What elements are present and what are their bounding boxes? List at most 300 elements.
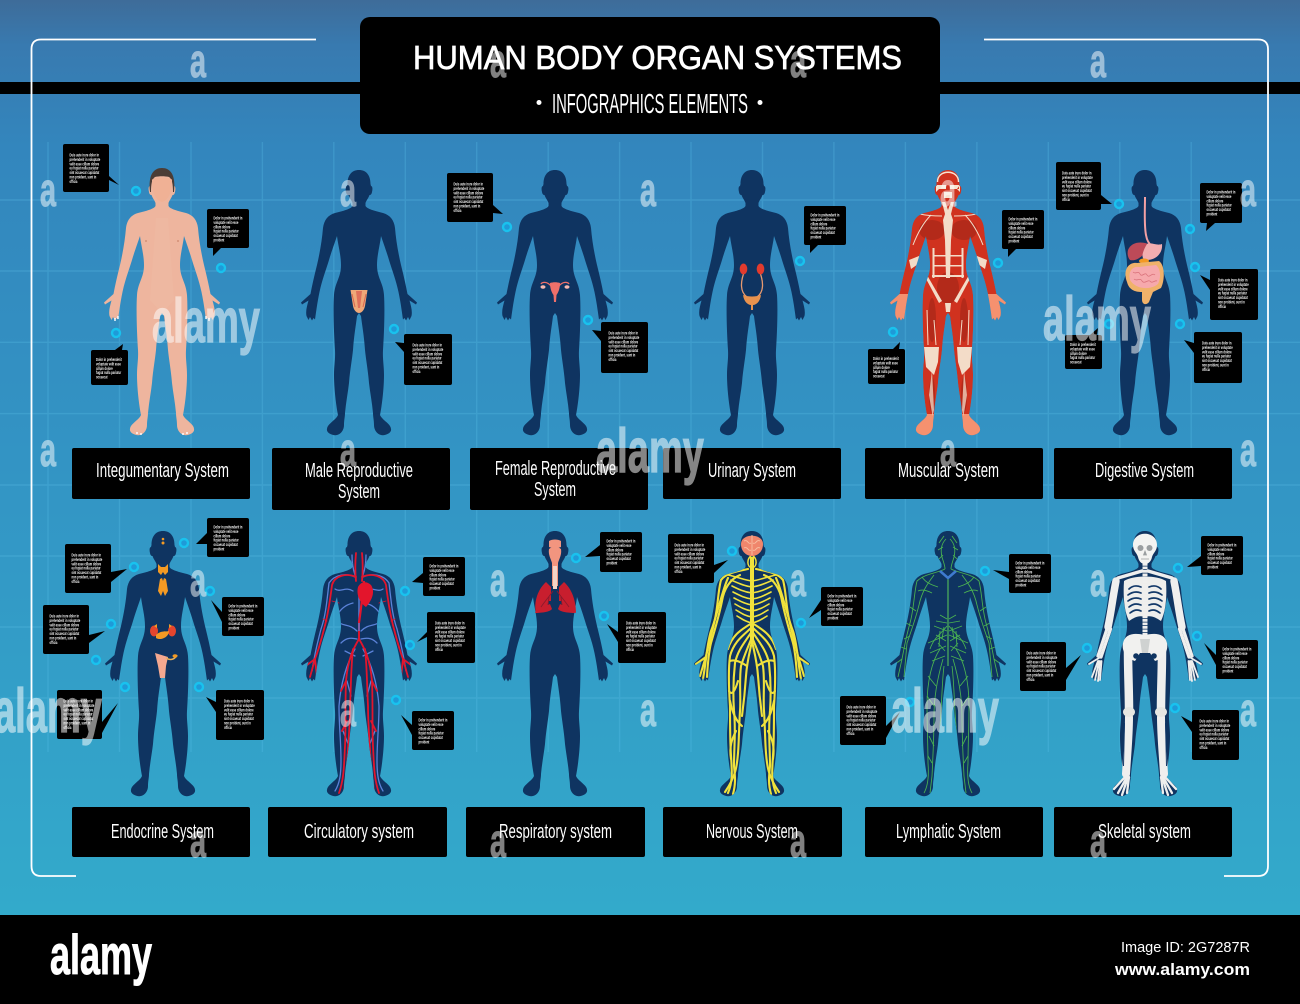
callouts: skeletal: cillum dolore	[1222, 656, 1239, 661]
subtitle	[536, 88, 762, 119]
callouts: endocrine: officia	[50, 640, 58, 645]
label: Urinary System	[663, 448, 841, 499]
callouts: skeletal: proident	[1222, 669, 1234, 674]
watermarks: a	[190, 34, 207, 87]
watermarks: alamy	[152, 287, 260, 356]
vessels	[307, 553, 411, 793]
callout: male reproductive: eu fugiat nulla pariatur	[412, 356, 442, 361]
callouts: circulatory: cillum dolore	[418, 727, 435, 732]
callouts: endocrine: prehenderit in voluptate	[64, 703, 94, 708]
callouts: endocrine: Dolor in prehenderit in	[228, 604, 258, 609]
callouts: lymphatic: velit esse cillum dolore	[846, 714, 876, 719]
callouts: endocrine: officia	[64, 725, 72, 730]
callouts: lymphatic: officia	[846, 731, 855, 736]
callouts: circulatory: Duis aute irure dolor in	[435, 621, 465, 626]
callouts: female reproductive: sint occaecat cupidatat	[608, 348, 639, 353]
callouts: endocrine: proident	[228, 626, 240, 631]
callouts: respiratory: velit esse cillum dolore	[626, 630, 656, 635]
callouts: circulatory: fugiat nulla pariatur	[418, 731, 444, 736]
watermarks: a	[640, 163, 657, 216]
callouts: skeletal: velit esse cillum dolore	[1200, 728, 1229, 733]
callouts: female reproductive: officia	[608, 357, 617, 362]
watermarks: a	[1240, 683, 1257, 736]
callouts: respiratory: non proident, sunt in	[626, 643, 653, 648]
callouts: endocrine: eu fugiat nulla pariatur	[224, 712, 253, 717]
callouts: muscular: fugiat nulla pariatur	[873, 370, 899, 374]
organ: intestines	[1125, 261, 1164, 304]
callouts: lymphatic: non proident, sunt in	[1026, 673, 1054, 678]
callouts: respiratory	[572, 532, 666, 663]
callouts: circulatory: eu fugiat nulla pariatur	[435, 634, 464, 639]
figure: digestive system	[1087, 170, 1203, 435]
callouts: circulatory: Dolor in prehenderit in	[430, 564, 459, 569]
label: Skeletal system	[1054, 807, 1232, 857]
callouts: female reproductive: velit esse cillum dolore	[454, 191, 483, 196]
callout: urinary: voluptate velit esse	[810, 217, 835, 222]
watermarks: a	[790, 814, 807, 867]
figure: skeletal system	[1087, 531, 1203, 796]
label: Circulatory system	[268, 807, 447, 857]
callouts: muscular: occaecat	[873, 374, 885, 379]
callouts: digestive: Duis aute irure dolor in	[1062, 171, 1092, 176]
callouts: integumentary: Dolor in prehenderit in	[214, 216, 243, 221]
callouts: endocrine: proident	[214, 547, 225, 552]
callouts: circulatory: Dolor in prehenderit in	[418, 718, 448, 723]
callouts: muscular: Dolor in prehenderit	[873, 356, 899, 361]
callouts: integumentary: officia	[70, 179, 78, 184]
callouts: integumentary: cillum dolore	[96, 366, 113, 371]
label: Male Reproductive System	[272, 448, 450, 510]
label: Lymphatic System: Lymphatic System	[896, 820, 1001, 843]
callouts: muscular: Dolor in prehenderit in	[1008, 217, 1038, 222]
callouts: digestive: prehenderit in voluptate	[1202, 345, 1233, 350]
callouts: female reproductive: prehenderit in voluptate	[608, 335, 639, 340]
callouts: muscular	[868, 210, 1044, 384]
organ: urinary	[740, 264, 764, 310]
watermarks: a	[340, 683, 357, 736]
skeleton	[1089, 534, 1201, 795]
callouts: lymphatic: velit esse cillum dolore	[1026, 660, 1056, 665]
label: Nervous System: Nervous System	[706, 820, 798, 843]
callouts: endocrine	[43, 518, 264, 740]
callouts: integumentary: prehenderit in voluptate	[70, 157, 100, 162]
callouts: circulatory: fugiat nulla pariatur	[430, 577, 455, 582]
callouts: endocrine: eu fugiat nulla pariatur	[50, 627, 79, 632]
callout: male reproductive: non proident, sunt in	[412, 365, 440, 370]
callouts: endocrine: eu fugiat nulla pariatur	[72, 566, 101, 571]
callouts: digestive: velit esse cillum dolore	[1218, 287, 1248, 292]
callout: urinary: proident	[810, 235, 822, 240]
organ: esophagus	[1145, 197, 1152, 246]
callouts: female reproductive: prehenderit in voluptate	[454, 186, 484, 191]
label: Circulatory system: Circulatory system	[304, 820, 414, 843]
figure: circulatory system	[301, 531, 417, 796]
callouts: muscular: voluptate velit esse	[1008, 221, 1033, 226]
callouts: endocrine: Duis aute irure dolor in	[224, 699, 254, 704]
callouts: respiratory: cillum dolore	[606, 548, 623, 553]
callouts: respiratory: eu fugiat nulla pariatur	[626, 634, 655, 639]
callouts: skeletal	[1171, 536, 1258, 760]
callouts: skeletal: occaecat cupidatat	[1222, 664, 1247, 669]
callouts: lymphatic: officia	[1026, 677, 1035, 682]
watermarks: a	[940, 163, 957, 216]
callouts: circulatory: voluptate velit esse	[430, 568, 454, 573]
callouts: digestive: cillum dolore	[1070, 351, 1087, 356]
callouts: nervous: Duis aute irure dolor in	[674, 543, 705, 548]
label: Male Reproductive System: System	[338, 480, 380, 503]
callouts: skeletal: voluptate velit esse	[1208, 547, 1232, 552]
callouts: nervous: cillum dolore	[828, 603, 844, 608]
callouts: endocrine: velit esse cillum dolore	[72, 562, 101, 567]
callouts: circulatory	[392, 557, 475, 750]
watermarks: a	[940, 423, 957, 476]
figure: respiratory system	[497, 531, 613, 796]
callouts: respiratory: Dolor in prehenderit in	[606, 539, 636, 544]
callouts: lymphatic: Duis aute irure dolor in	[846, 705, 877, 710]
callouts: circulatory: officia	[435, 647, 444, 652]
callouts: endocrine: non proident, sunt in	[64, 721, 91, 726]
callout: urinary	[796, 206, 846, 265]
callouts: lymphatic: prehenderit in voluptate	[1026, 655, 1057, 660]
figure: integumentary system	[104, 168, 220, 435]
callouts: circulatory: prehenderit in voluptate	[435, 625, 466, 630]
callouts: digestive: officia	[1218, 304, 1227, 309]
callouts: endocrine: sint occaecat cupidatat	[72, 570, 102, 575]
callouts: integumentary: voluptate velit esse	[214, 220, 238, 225]
callouts: digestive: occaecat	[1070, 360, 1082, 365]
callouts: digestive: voluptate velit esse	[1070, 347, 1095, 352]
callouts: muscular: cillum dolore	[873, 365, 890, 370]
organ: lungs	[535, 582, 576, 613]
footer logo: alamy	[50, 923, 152, 986]
callouts: circulatory: cillum dolore	[430, 573, 446, 578]
callouts: lymphatic: occaecat cupidatat	[1016, 578, 1040, 583]
callouts: endocrine: velit esse cillum dolore	[50, 623, 79, 628]
callouts: digestive: voluptate velit esse	[1206, 194, 1231, 199]
callouts: endocrine: voluptate velit esse	[228, 608, 253, 613]
callouts: lymphatic	[840, 554, 1091, 745]
callouts: nervous: sint occaecat cupidatat	[674, 560, 705, 565]
callouts: circulatory: velit esse cillum dolore	[435, 630, 465, 635]
callouts: integumentary: voluptate velit esse	[96, 362, 121, 367]
callouts: digestive: velit esse cillum dolore	[1202, 350, 1232, 355]
label: Muscular System	[865, 448, 1043, 499]
heart	[357, 582, 373, 607]
label: Integumentary System	[72, 448, 250, 499]
footer bar	[0, 915, 1300, 1004]
callouts: respiratory: prehenderit in voluptate	[626, 625, 657, 630]
watermarks: a	[1090, 34, 1107, 87]
callouts: lymphatic: proident	[1016, 583, 1027, 588]
callout: male reproductive: Duis aute irure dolor in	[412, 343, 443, 348]
callouts: endocrine: Duis aute irure dolor in	[72, 553, 102, 558]
callouts: respiratory: voluptate velit esse	[606, 543, 631, 548]
callouts: skeletal: occaecat cupidatat	[1208, 560, 1232, 565]
subtitle: INFOGRAPHICS ELEMENTS	[552, 88, 748, 119]
callouts: skeletal: fugiat nulla pariatur	[1208, 556, 1233, 561]
callouts: muscular: fugiat nulla pariatur	[1008, 230, 1034, 235]
callouts: digestive: proident	[1206, 212, 1218, 217]
callouts: digestive: eu fugiat nulla pariatur	[1218, 291, 1247, 296]
label: Lymphatic System	[865, 807, 1043, 857]
callouts: nervous: fugiat nulla pariatur	[828, 607, 853, 612]
callouts: respiratory: proident	[606, 561, 618, 566]
callouts: skeletal: voluptate velit esse	[1222, 651, 1247, 656]
callouts: digestive: velit esse cillum dolore	[1062, 180, 1092, 185]
callouts: circulatory: voluptate velit esse	[418, 722, 443, 727]
callouts: respiratory: Duis aute irure dolor in	[626, 621, 656, 626]
callouts: digestive: prehenderit in voluptate	[1218, 282, 1249, 287]
callouts: skeletal: Dolor in prehenderit in	[1222, 647, 1252, 652]
figure: female reproductive system	[497, 170, 613, 435]
title block	[360, 17, 940, 134]
callouts: digestive: officia	[1202, 367, 1211, 372]
label: Endocrine System	[72, 807, 250, 857]
callouts: muscular: proident	[1008, 239, 1020, 244]
watermarks: a	[790, 34, 807, 87]
callouts: endocrine: cillum dolore	[228, 613, 245, 618]
callouts: integumentary: occaecat cupidatat	[214, 233, 238, 238]
organ: airway	[549, 540, 561, 586]
callouts: circulatory: proident	[418, 740, 430, 745]
callouts: endocrine: fugiat nulla pariatur	[214, 538, 239, 543]
callouts: female reproductive: Duis aute irure dolor in	[454, 182, 484, 187]
callouts: endocrine: prehenderit in voluptate	[72, 557, 102, 562]
callouts: nervous: occaecat cupidatat	[828, 611, 852, 616]
callouts: integumentary: Dolor in prehenderit	[96, 357, 122, 362]
label: Digestive System	[1054, 448, 1232, 499]
callouts: digestive: Duis aute irure dolor in	[1202, 341, 1232, 346]
callouts: endocrine: cillum dolore	[214, 534, 230, 539]
watermarks: a	[490, 814, 507, 867]
callouts: respiratory: officia	[626, 647, 635, 652]
callouts: digestive: fugiat nulla pariatur	[1070, 356, 1096, 360]
callouts: endocrine: eu fugiat nulla pariatur	[64, 712, 93, 717]
label: Male Reproductive System: Male Reproductive	[305, 459, 413, 482]
watermarks: a	[190, 553, 207, 606]
footer image id	[1114, 939, 1250, 979]
callouts: nervous: non proident, sunt in	[674, 565, 702, 570]
label: Muscular System: Muscular System	[898, 459, 999, 482]
callouts: digestive: sint occaecat cupidatat	[1202, 358, 1232, 363]
callouts: skeletal: fugiat nulla pariatur	[1222, 660, 1248, 665]
label: Urinary System: Urinary System	[708, 459, 796, 482]
callouts: nervous: eu fugiat nulla pariatur	[674, 556, 704, 561]
figure: lymphatic system	[890, 531, 1006, 796]
callout: urinary: cillum dolore	[810, 222, 827, 227]
callouts: skeletal: officia	[1200, 745, 1208, 750]
title: HUMAN BODY ORGAN SYSTEMS	[413, 40, 902, 77]
callout: male reproductive	[390, 325, 452, 385]
callouts: nervous: voluptate velit esse	[828, 598, 852, 603]
watermarks: a	[340, 163, 357, 216]
callouts: lymphatic: sint occaecat cupidatat	[846, 722, 877, 727]
callouts: lymphatic: voluptate velit esse	[1016, 565, 1040, 570]
callouts: endocrine: officia	[224, 725, 233, 730]
callouts: lymphatic: sint occaecat cupidatat	[1026, 668, 1057, 673]
callouts: respiratory: sint occaecat cupidatat	[626, 638, 656, 643]
callouts: lymphatic: Duis aute irure dolor in	[1026, 651, 1057, 656]
callouts: endocrine: non proident, sunt in	[50, 636, 77, 641]
figure: endocrine system	[105, 531, 221, 796]
organ: endocrine glands	[150, 538, 178, 678]
callouts: integumentary: occaecat	[96, 375, 108, 380]
watermarks: a	[1090, 553, 1107, 606]
label: Digestive System: Digestive System	[1095, 459, 1194, 482]
callouts: circulatory: occaecat cupidatat	[430, 581, 454, 586]
callouts: lymphatic: prehenderit in voluptate	[846, 709, 877, 714]
callouts: skeletal: cillum dolore	[1208, 552, 1224, 557]
callouts: lymphatic: Dolor in prehenderit in	[1016, 561, 1045, 566]
callout: urinary: fugiat nulla pariatur	[810, 226, 836, 231]
callouts: lymphatic: fugiat nulla pariatur	[1016, 574, 1041, 579]
callouts: nervous: proident	[828, 616, 839, 621]
label: Endocrine System: Endocrine System	[111, 820, 214, 843]
callouts: skeletal: Duis aute irure dolor in	[1200, 719, 1230, 724]
callouts: digestive: Dolor in prehenderit in	[1206, 190, 1236, 195]
callouts: endocrine: prehenderit in voluptate	[224, 703, 255, 708]
callouts: endocrine: non proident, sunt in	[72, 575, 99, 580]
watermarks: alamy	[891, 677, 999, 746]
callouts: skeletal: Dolor in prehenderit in	[1208, 543, 1237, 548]
watermarks: a	[640, 683, 657, 736]
label: Respiratory system: Respiratory system	[499, 820, 612, 843]
watermarks: alamy	[596, 417, 704, 486]
callouts: integumentary	[63, 144, 249, 385]
callout: male reproductive: sint occaecat cupidatat	[412, 360, 443, 365]
label: Female Reproductive System: Female Reproductive	[495, 457, 616, 480]
callouts: endocrine: occaecat cupidatat	[214, 542, 238, 547]
figure: male reproductive system	[301, 170, 417, 435]
callouts: integumentary: fugiat nulla pariatur	[214, 229, 239, 234]
callouts: female reproductive: velit esse cillum dolore	[608, 340, 638, 345]
callouts: lymphatic: cillum dolore	[1016, 570, 1032, 575]
callouts: circulatory: sint occaecat cupidatat	[435, 638, 465, 643]
watermarks: a	[40, 423, 57, 476]
callouts: digestive: Duis aute irure dolor in	[1218, 278, 1248, 283]
figure: muscular system	[886, 170, 1010, 438]
organ: female reproductive	[540, 282, 570, 302]
callouts: digestive: officia	[1062, 197, 1071, 202]
callouts: female reproductive: Duis aute irure dolor in	[608, 331, 639, 336]
callouts: digestive: Dolor in prehenderit	[1070, 342, 1096, 347]
callouts: endocrine: velit esse cillum dolore	[224, 708, 254, 713]
callouts: endocrine: officia	[72, 579, 80, 584]
callouts: endocrine: voluptate velit esse	[214, 529, 238, 534]
callouts: digestive: non proident, sunt in	[1202, 363, 1229, 368]
nerves	[696, 555, 808, 794]
callouts: integumentary: proident	[214, 238, 225, 243]
callouts: skeletal: eu fugiat nulla pariatur	[1200, 732, 1229, 737]
callouts: endocrine: prehenderit in voluptate	[50, 618, 80, 623]
callouts: digestive: prehenderit in voluptate	[1062, 175, 1093, 180]
callouts: integumentary: cillum dolore	[214, 225, 230, 230]
callouts: digestive: eu fugiat nulla pariatur	[1062, 184, 1091, 189]
callouts: nervous: prehenderit in voluptate	[674, 547, 705, 552]
callouts: circulatory: proident	[430, 586, 441, 591]
footer image id: www.alamy.com	[1114, 960, 1250, 979]
callouts: integumentary: non proident, sunt in	[70, 175, 97, 180]
organ: male reproductive	[350, 290, 368, 313]
callouts: circulatory: occaecat cupidatat	[418, 735, 443, 740]
callouts: female reproductive: eu fugiat nulla pariatur	[608, 344, 638, 349]
callouts: respiratory: fugiat nulla pariatur	[606, 552, 632, 557]
label: Female Reproductive System	[470, 448, 648, 510]
callouts: endocrine: Duis aute irure dolor in	[50, 614, 80, 619]
organ: stomach and liver	[1128, 242, 1162, 264]
watermarks: a	[1090, 814, 1107, 867]
callouts: female reproductive	[447, 173, 648, 373]
callouts: digestive: cillum dolore	[1206, 199, 1223, 204]
callout: urinary: Dolor in prehenderit in	[810, 213, 840, 218]
callouts: endocrine: non proident, sunt in	[224, 721, 251, 726]
callouts: female reproductive: officia	[454, 208, 462, 213]
callouts: digestive	[1056, 162, 1258, 383]
callouts: female reproductive: non proident, sunt in	[454, 204, 481, 209]
callout: male reproductive: prehenderit in voluptate	[412, 347, 443, 352]
callout: urinary: occaecat cupidatat	[810, 230, 835, 235]
watermarks: a	[790, 553, 807, 606]
callouts: respiratory: occaecat cupidatat	[606, 556, 631, 561]
callout: male reproductive: officia	[412, 369, 421, 374]
callouts: digestive: occaecat cupidatat	[1206, 207, 1231, 212]
callouts: endocrine: Dolor in prehenderit in	[214, 525, 243, 530]
watermarks: a	[40, 163, 57, 216]
watermarks: a	[490, 553, 507, 606]
callouts: endocrine: fugiat nulla pariatur	[228, 617, 254, 622]
callouts: endocrine: occaecat cupidatat	[228, 621, 253, 626]
brain	[741, 535, 763, 556]
callouts: female reproductive: sint occaecat cupidatat	[454, 199, 484, 204]
callouts: digestive: eu fugiat nulla pariatur	[1202, 354, 1231, 359]
watermarks: a	[1240, 163, 1257, 216]
label: Female Reproductive System: System	[534, 478, 576, 501]
callout: male reproductive: velit esse cillum dolore	[412, 352, 442, 357]
callouts: endocrine: sint occaecat cupidatat	[64, 716, 94, 721]
lymph vessels	[894, 536, 1002, 793]
callouts: digestive: sint occaecat cupidatat	[1218, 295, 1248, 300]
label: Nervous System	[663, 807, 842, 857]
callouts: lymphatic: eu fugiat nulla pariatur	[1026, 664, 1056, 669]
callouts: digestive: non proident, sunt in	[1062, 193, 1089, 198]
callouts: digestive: non proident, sunt in	[1218, 300, 1245, 305]
callouts: skeletal: prehenderit in voluptate	[1200, 723, 1230, 728]
figure: urinary system	[694, 170, 810, 435]
callouts: lymphatic: eu fugiat nulla pariatur	[846, 718, 876, 723]
callouts: female reproductive: eu fugiat nulla pariatur	[454, 195, 483, 200]
callouts: muscular: voluptate velit esse	[873, 361, 898, 366]
callouts: nervous	[668, 534, 863, 627]
callouts: nervous: officia	[674, 569, 683, 574]
watermarks: a	[490, 34, 507, 87]
callouts: digestive: fugiat nulla pariatur	[1206, 203, 1232, 208]
callouts: endocrine: sint occaecat cupidatat	[50, 631, 80, 636]
label: Skeletal system: Skeletal system	[1098, 820, 1191, 843]
callouts: integumentary: sint occaecat cupidatat	[70, 170, 100, 175]
callouts: nervous: velit esse cillum dolore	[674, 552, 704, 557]
label: Integumentary System: Integumentary System	[96, 459, 229, 482]
skull	[1133, 534, 1157, 564]
callouts: integumentary: fugiat nulla pariatur	[96, 371, 122, 375]
callouts: integumentary: eu fugiat nulla pariatur	[70, 166, 99, 171]
callouts: endocrine: sint occaecat cupidatat	[224, 716, 254, 721]
callouts: skeletal: proident	[1208, 565, 1219, 570]
footer image id: Image ID: 2G7287R	[1121, 939, 1250, 956]
callouts: endocrine: velit esse cillum dolore	[64, 708, 93, 713]
label: Respiratory system	[466, 807, 645, 857]
watermarks: a	[1240, 423, 1257, 476]
callouts: muscular: cillum dolore	[1008, 226, 1025, 231]
